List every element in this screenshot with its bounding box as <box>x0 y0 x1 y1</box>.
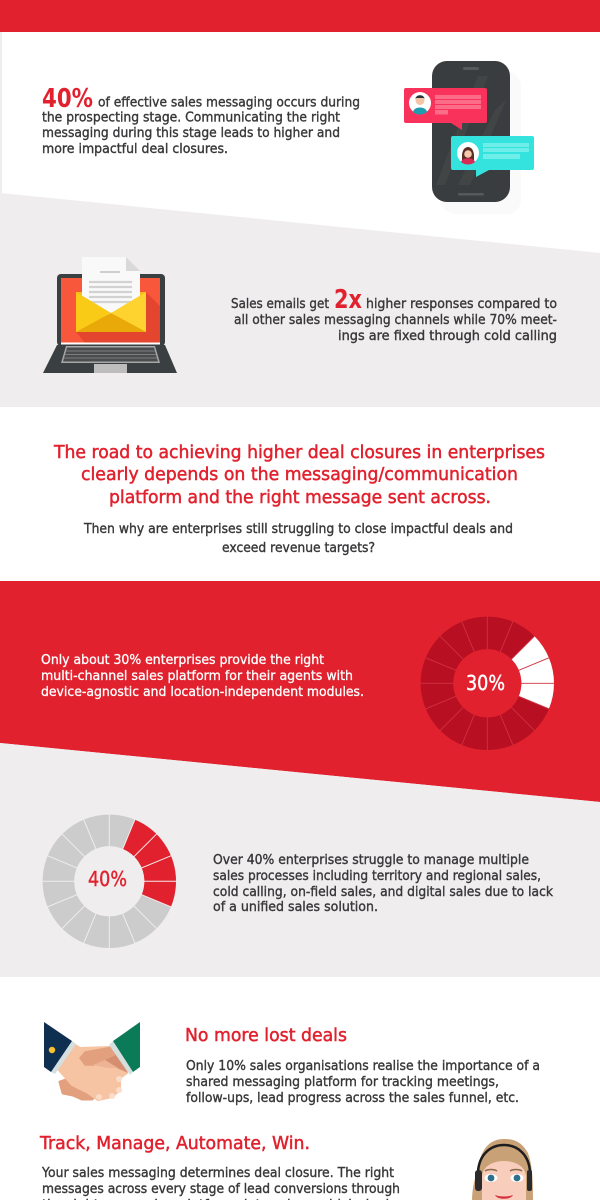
heading: road to higher deal closures <box>53 442 545 508</box>
text block: 40% struggle <box>213 853 553 915</box>
icon: laptop with email envelope <box>43 257 177 373</box>
text block: why enterprises struggle: exceed revenue targets? <box>222 541 375 556</box>
icon: smartphone with chat bubbles <box>404 61 534 214</box>
heading: road to higher deal closures: platform and the right message sent across. <box>109 487 491 508</box>
text block: 30% enterprises: device-agnostic and location-independent modules. <box>41 685 364 700</box>
text block: shared messaging platform: shared messaging platform for tracking meetings, <box>186 1075 499 1090</box>
text block: 30% enterprises: Only about 30% enterprises provide the right <box>41 653 324 668</box>
text block: 40% struggle: Over 40% enterprises struggle to manage multiple <box>213 853 529 868</box>
top red banner <box>0 0 600 32</box>
text block: shared messaging platform: follow-ups, lead progress across the sales funnel, etc. <box>186 1091 519 1106</box>
panel: 30% stat red background <box>0 581 600 802</box>
text block: sales emails 2x stat: higher responses compared to <box>366 297 557 312</box>
text block: 30% enterprises <box>41 653 364 700</box>
text block: 40% struggle: sales processes including territory and regional sales, <box>213 869 541 884</box>
text block: why enterprises struggle <box>83 522 513 556</box>
panel: email stat background <box>0 193 600 407</box>
text block: 40% prospecting stat: messaging during this stage leads to higher and <box>42 126 340 141</box>
text block: 40% prospecting stat: of effective sales messaging occurs during <box>98 96 360 110</box>
panel: 40% stat grey background <box>0 743 600 977</box>
text block: 40% prospecting stat <box>42 84 360 157</box>
icon: handshake <box>44 1022 140 1100</box>
paper letter <box>82 257 140 316</box>
text block: shared messaging platform: Only 10% sales organisations realise the importance of a <box>186 1059 540 1074</box>
text block: why enterprises struggle: Then why are enterprises still struggling to close impactful deals and <box>83 522 513 537</box>
text block: 30% enterprises: multi-channel sales platform for their agents with <box>41 669 353 684</box>
text block: sales messaging determines closure <box>41 1166 400 1200</box>
heading: track manage automate win: Track, Manage, Automate, Win. <box>39 1133 310 1154</box>
text block: 40% prospecting stat: more impactful deal closures. <box>42 142 228 157</box>
heading: no more lost deals: No more lost deals <box>185 1025 347 1046</box>
text block: 40% prospecting stat: 40% <box>42 84 93 114</box>
text block: sales emails 2x stat <box>231 285 557 344</box>
text block: sales emails 2x stat: all other sales messaging channels while 70% meet- <box>234 313 557 328</box>
text block: sales messaging determines closure: messages across every stage of lead conversions through <box>42 1182 400 1197</box>
teal chat bubble <box>451 136 534 177</box>
text block: shared messaging platform <box>186 1059 540 1106</box>
text block: sales emails 2x stat: ings are fixed through cold calling <box>338 329 557 344</box>
chart: 40% donut <box>42 814 176 948</box>
text block: 40% struggle: cold calling, on-field sales, and digital sales due to lack <box>213 885 553 900</box>
heading: road to higher deal closures: The road to achieving higher deal closures in enterprises <box>53 442 545 463</box>
text block: sales emails 2x stat: 2x <box>334 285 362 315</box>
icon: support agent with headset <box>472 1139 533 1200</box>
text block: sales messaging determines closure: Your sales messaging determines deal closure. The right <box>41 1166 394 1181</box>
chart: 30% donut <box>420 616 554 750</box>
red chat bubble <box>404 88 487 130</box>
text block: 40% struggle: of a unified sales solution. <box>213 900 378 915</box>
text block: sales emails 2x stat: Sales emails get <box>231 297 329 312</box>
chart: 40% donut: 40% <box>88 867 127 891</box>
text block: 40% prospecting stat: the prospecting stage. Communicating the right <box>42 110 340 126</box>
chart: 30% donut: 30% <box>466 671 505 695</box>
heading: road to higher deal closures: clearly depends on the messaging/communication <box>81 464 518 485</box>
